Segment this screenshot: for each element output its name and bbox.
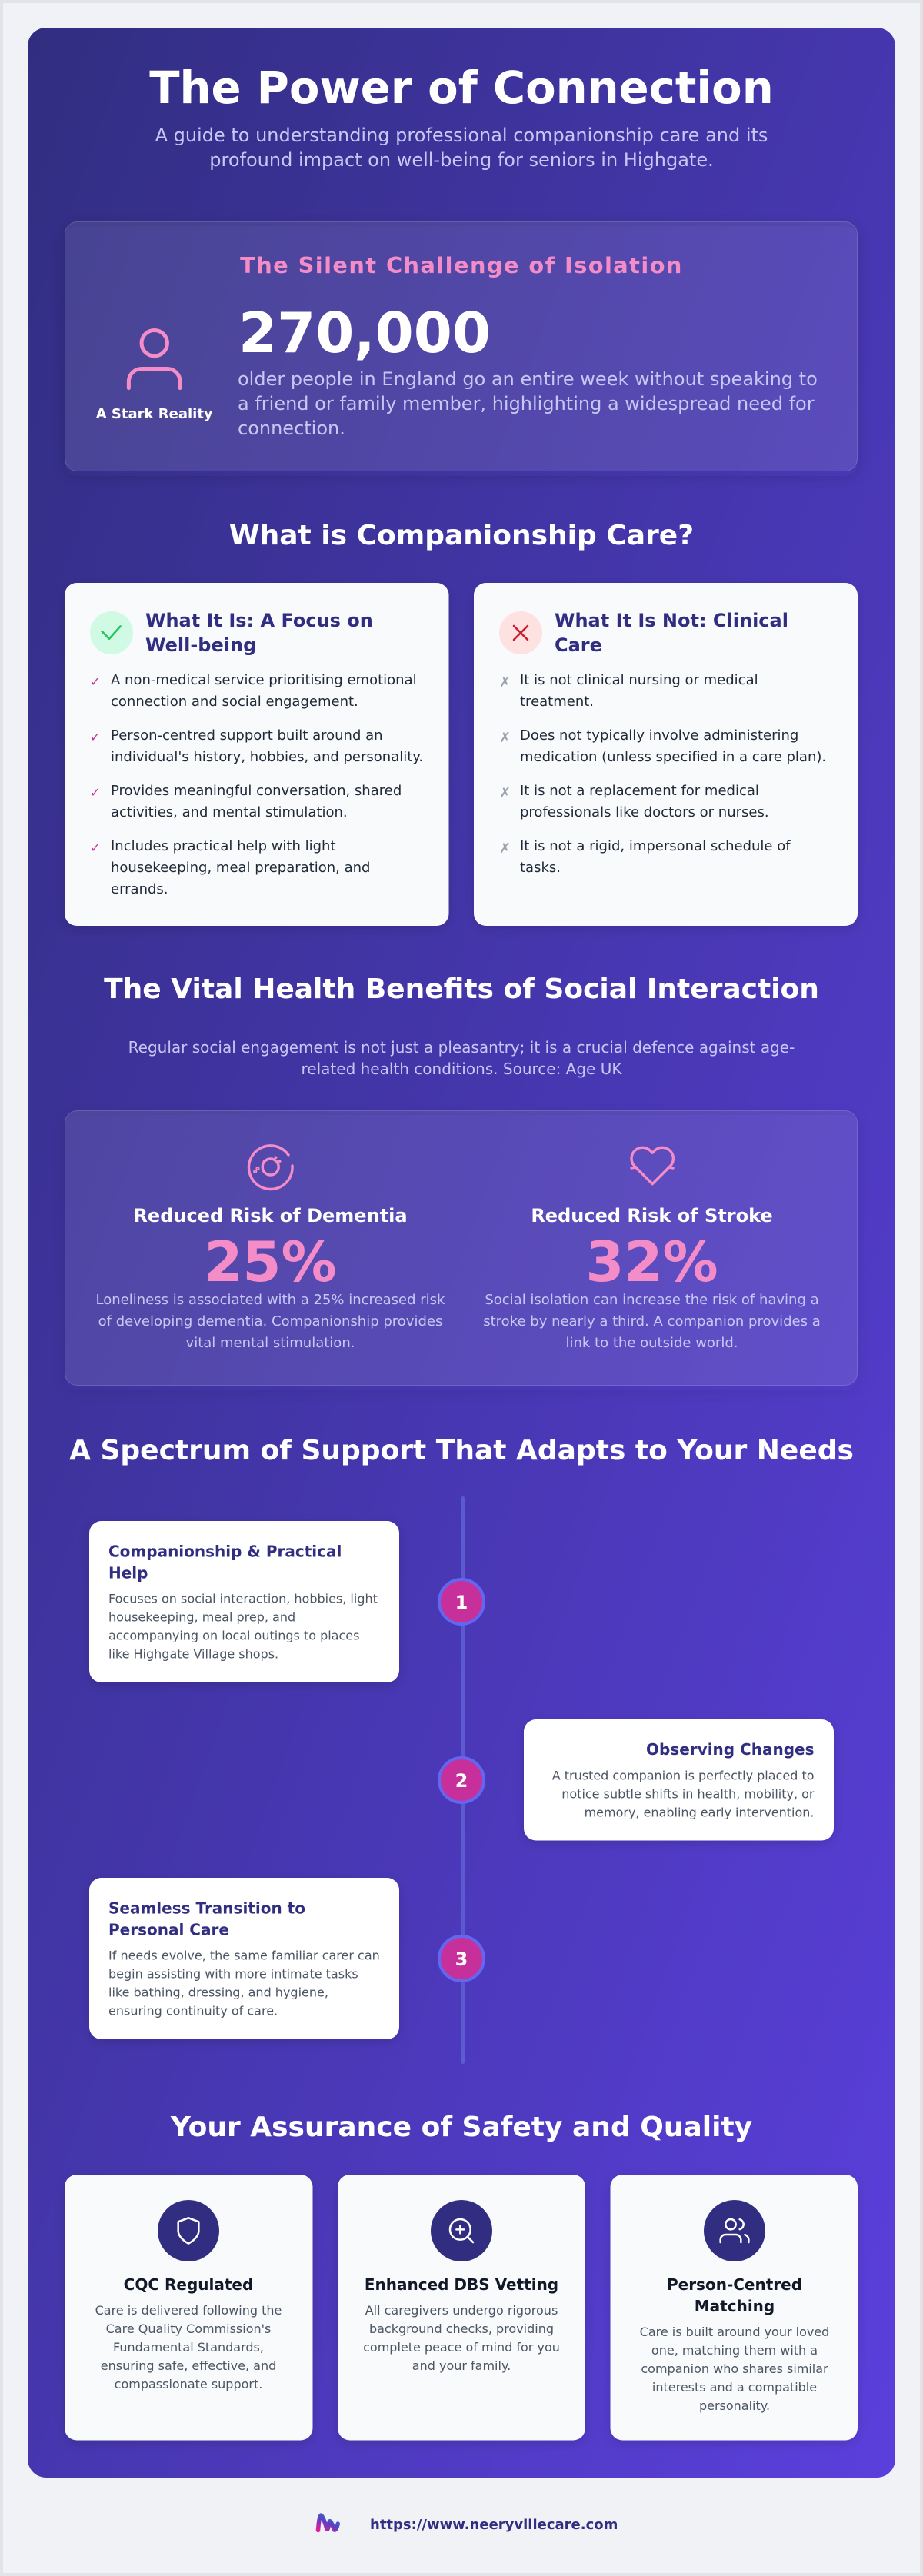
card: DBS vetting: background checks, providing <box>369 2321 554 2336</box>
subtitle: profound impact on well-being for seniors in Highgate. <box>209 149 714 171</box>
card: person-centred matching: one, matching them with a <box>651 2343 818 2358</box>
icon: logo <box>318 2515 338 2530</box>
list: individual's history, hobbies, and personality. <box>111 749 423 765</box>
heading: what is companionship care: What is Companionship Care? <box>229 520 694 551</box>
benefit text: link to the outside world. <box>566 1335 738 1351</box>
step 2 card <box>524 1719 834 1841</box>
benefit text: Loneliness is associated with a 25% increased risk <box>96 1292 445 1308</box>
step 3 card: If needs evolve, the same familiar carer can <box>108 1949 380 1962</box>
card: person-centred matching: interests and a compatible <box>652 2380 817 2395</box>
list: treatment. <box>520 694 594 710</box>
statistic description <box>238 368 818 439</box>
card: person-centred matching: Matching <box>695 2297 775 2315</box>
icon caption: A Stark Reality <box>96 406 213 422</box>
benefit title: Reduced Risk of Stroke <box>531 1205 773 1226</box>
step 3 marker <box>439 1936 484 1981</box>
list: It is not a replacement for medical <box>520 783 759 799</box>
list: medication (unless specified in a care plan). <box>520 749 826 765</box>
list: ✗ <box>499 840 511 857</box>
icon: magnifier <box>431 2200 492 2261</box>
card: DBS vetting: Enhanced DBS Vetting <box>365 2275 558 2294</box>
card: person-centred matching: personality. <box>699 2398 770 2413</box>
benefit text <box>483 1292 821 1351</box>
icon: brain <box>248 1146 292 1189</box>
list: Does not typically involve administering <box>520 727 798 744</box>
card: DBS vetting: and your family. <box>412 2358 511 2373</box>
card: DBS vetting <box>338 2175 585 2441</box>
list: A non-medical service prioritising emotional <box>111 672 417 688</box>
card: DBS vetting: complete peace of mind for you <box>363 2340 560 2355</box>
step 1 card: accompanying on local outings to places <box>108 1629 359 1642</box>
list: ✗ <box>499 785 511 801</box>
step 1 marker: 1 <box>455 1592 468 1613</box>
benefits intro <box>128 1038 795 1078</box>
step 1 marker <box>439 1579 484 1624</box>
benefit text: stroke by nearly a third. A companion provides a <box>483 1313 821 1330</box>
card: CQC regulated: CQC Regulated <box>124 2275 253 2294</box>
subtitle <box>155 125 768 171</box>
card: CQC regulated: compassionate support. <box>115 2377 262 2391</box>
benefit: dementia <box>96 1146 445 1351</box>
list: professionals like doctors or nurses. <box>520 804 769 820</box>
icon: check <box>90 611 133 654</box>
percentage: 25% <box>204 1230 337 1294</box>
card: person-centred matching: companion who shares similar <box>641 2361 828 2376</box>
card heading: Care <box>555 634 602 656</box>
card: CQC regulated: Fundamental Standards, <box>113 2340 264 2355</box>
heading: spectrum of support: A Spectrum of Support That Adapts to Your Needs <box>69 1435 854 1466</box>
panel: silent challenge of isolation <box>65 221 858 476</box>
list: It is not a rigid, impersonal schedule of <box>520 838 791 854</box>
list: ✓ <box>90 674 100 689</box>
list: errands. <box>111 881 168 897</box>
list: connection and social engagement. <box>111 694 358 710</box>
list: Person-centred support built around an <box>111 727 383 744</box>
list <box>90 672 423 897</box>
card: CQC regulated: Care Quality Commission's <box>106 2321 271 2336</box>
step 2 card: notice subtle shifts in health, mobility, or <box>561 1787 815 1801</box>
card: CQC regulated: ensuring safe, effective, and <box>101 2358 276 2373</box>
list: ✓ <box>90 840 100 855</box>
list: activities, and mental stimulation. <box>111 804 348 820</box>
list: housekeeping, meal preparation, and <box>111 860 370 876</box>
icon: cross <box>499 611 542 654</box>
benefits intro: related health conditions. Source: Age UK <box>302 1060 622 1078</box>
step 3 card: begin assisting with more intimate tasks <box>108 1967 358 1981</box>
panel: what it is <box>65 583 449 926</box>
step 3 card: Seamless Transition to <box>108 1899 305 1918</box>
step 3 card: like bathing, dressing, and hygiene, <box>108 1985 328 1999</box>
statistic description: a friend or family member, highlighting a widespread need for <box>238 393 815 414</box>
step 3 card: ensuring continuity of care. <box>108 2004 278 2018</box>
list: It is not clinical nursing or medical <box>520 672 758 688</box>
card: DBS vetting: All caregivers undergo rigorous <box>365 2303 558 2318</box>
step 1 card: Focuses on social interaction, hobbies, light <box>108 1592 378 1606</box>
benefit text <box>96 1292 445 1351</box>
list: ✗ <box>499 730 511 746</box>
card heading <box>145 610 373 656</box>
step 3 card <box>89 1878 399 2039</box>
step 2 marker: 2 <box>455 1770 468 1792</box>
title: The Power of Connection <box>149 62 774 114</box>
list: Includes practical help with light <box>111 838 336 854</box>
timeline <box>89 1496 834 2064</box>
benefit: stroke <box>483 1147 821 1351</box>
step 1 card: Companionship & Practical <box>108 1543 342 1561</box>
card heading: Well-being <box>145 634 256 656</box>
benefit text: of developing dementia. Companionship provides <box>98 1313 442 1330</box>
step 2 marker <box>439 1758 484 1802</box>
step 1 card: like Highgate Village shops. <box>108 1647 278 1661</box>
card heading: What It Is: A Focus on <box>145 610 373 631</box>
list <box>499 672 826 876</box>
panel heading: The Silent Challenge of Isolation <box>240 252 683 278</box>
icon: users <box>704 2200 765 2261</box>
card heading <box>555 610 788 656</box>
list: tasks. <box>520 860 561 876</box>
panel: what it is not <box>474 583 858 926</box>
statistic description: connection. <box>238 418 345 439</box>
step 1 card <box>89 1521 399 1682</box>
step 2 card: memory, enabling early intervention. <box>585 1806 814 1819</box>
benefit title: Reduced Risk of Dementia <box>133 1205 408 1226</box>
benefit text: Social isolation can increase the risk of having a <box>485 1292 819 1308</box>
statistic description: older people in England go an entire week without speaking to <box>238 368 818 390</box>
heading: health benefits: The Vital Health Benefits of Social Interaction <box>104 973 819 1005</box>
list: ✓ <box>90 785 100 800</box>
icon: shield <box>158 2200 219 2261</box>
benefit text: vital mental stimulation. <box>186 1335 355 1351</box>
footer <box>318 2515 618 2533</box>
card: person-centred matching <box>611 2175 858 2441</box>
heading: assurance: Your Assurance of Safety and Quality <box>170 2112 752 2143</box>
footer url: https://www.neeryvillecare.com <box>370 2517 618 2533</box>
list: ✓ <box>90 730 100 744</box>
step 3 marker: 3 <box>455 1949 468 1970</box>
card: person-centred matching: Person-Centred <box>667 2275 802 2294</box>
icon: heart <box>631 1147 673 1184</box>
list: Provides meaningful conversation, shared <box>111 783 402 799</box>
panel: health benefits <box>65 1110 858 1390</box>
step 2 card: Observing Changes <box>646 1740 814 1759</box>
step 1 card: Help <box>108 1564 148 1583</box>
icon: person <box>128 331 180 388</box>
card: CQC regulated <box>65 2175 312 2441</box>
benefits intro: Regular social engagement is not just a pleasantry; it is a crucial defence against age- <box>128 1038 795 1057</box>
list: ✗ <box>499 674 511 691</box>
card heading: What It Is Not: Clinical <box>555 610 788 631</box>
subtitle: A guide to understanding professional companionship care and its <box>155 125 768 146</box>
step 3 card: Personal Care <box>108 1921 229 1939</box>
card: person-centred matching: Care is built around your loved <box>640 2325 829 2339</box>
percentage: 32% <box>585 1230 718 1294</box>
step 1 card: housekeeping, meal prep, and <box>108 1610 295 1624</box>
step 2 card: A trusted companion is perfectly placed to <box>552 1769 814 1782</box>
big number: 270,000 <box>238 301 491 365</box>
card: CQC regulated: Care is delivered following the <box>95 2303 282 2318</box>
